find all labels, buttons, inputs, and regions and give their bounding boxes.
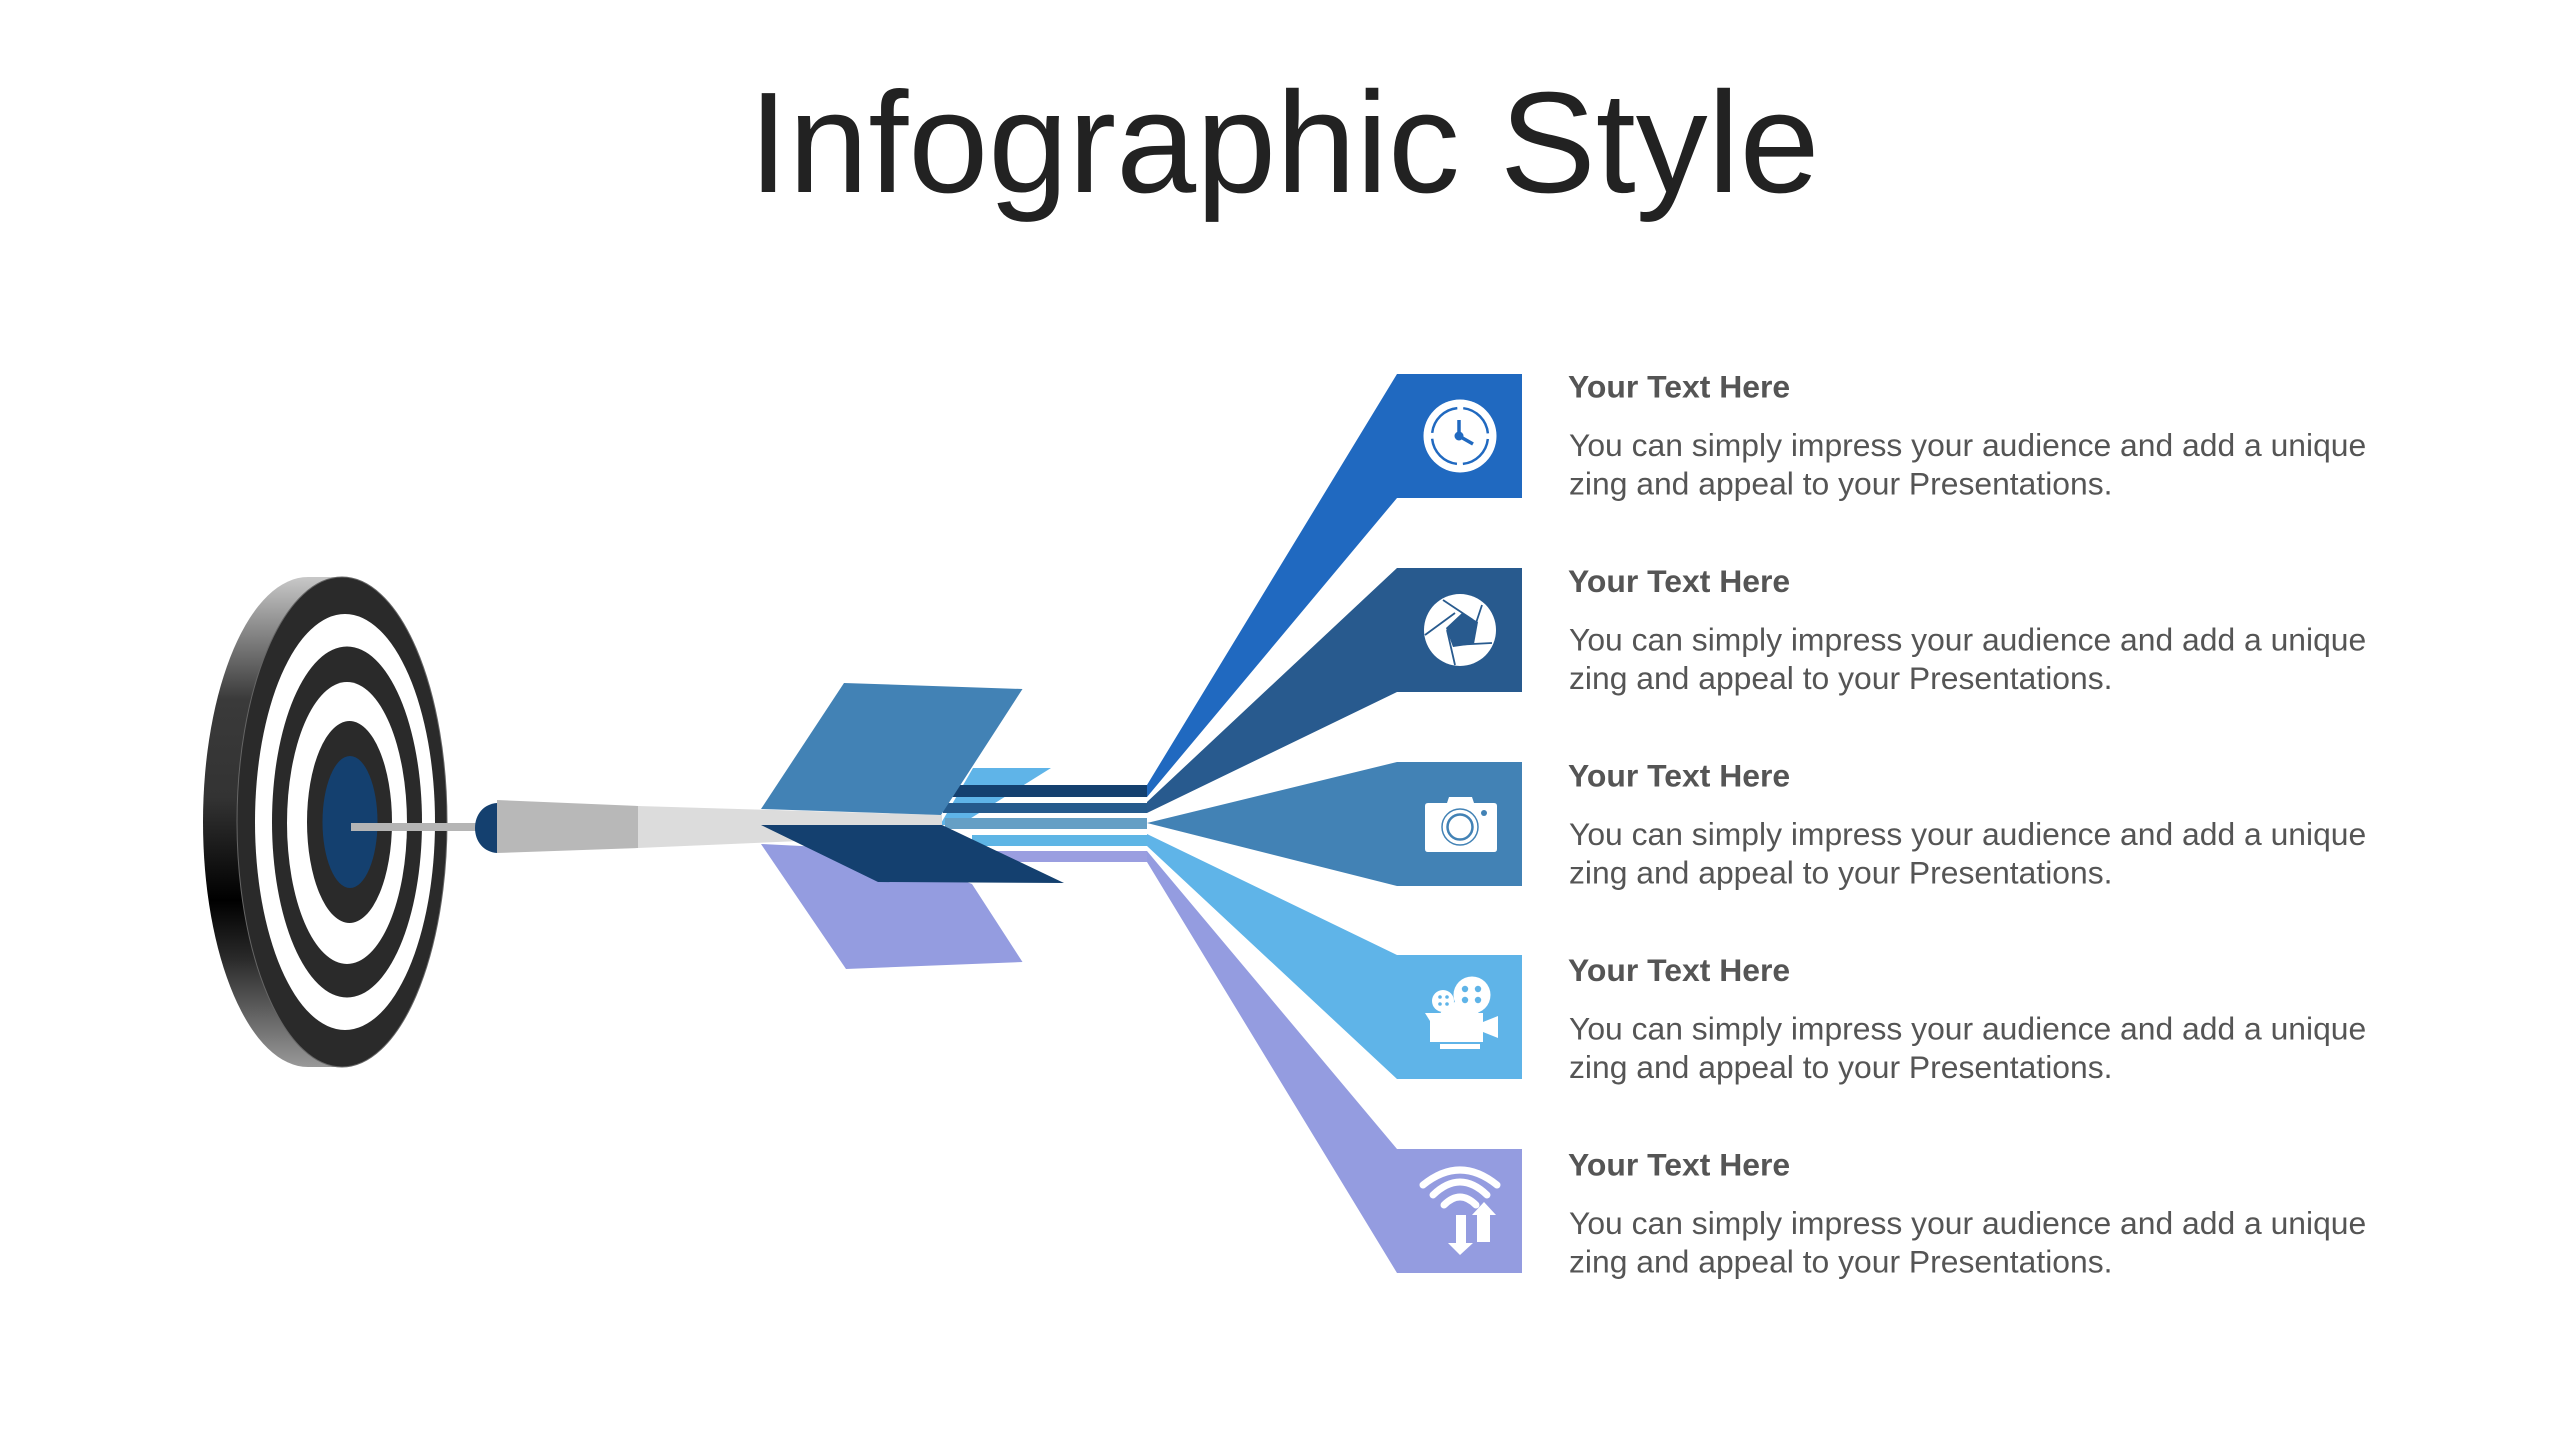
text block 2: Your Text Here xyxy=(1568,563,1790,599)
target rim xyxy=(203,577,342,1067)
text block 5: You can simply impress your audience and add a unique xyxy=(1569,1205,2366,1241)
icon: film camera xyxy=(1425,976,1498,1049)
dart barrel dark xyxy=(497,800,638,853)
text block 3: zing and appeal to your Presentations. xyxy=(1569,854,2112,890)
text block 4: You can simply impress your audience and add a unique xyxy=(1569,1010,2366,1046)
text block 3: Your Text Here xyxy=(1568,758,1790,794)
text block 1: Your Text Here xyxy=(1568,368,1790,404)
text block 5 xyxy=(1568,1146,2366,1280)
text block 2: You can simply impress your audience and add a unique xyxy=(1569,622,2366,658)
icon: shutter xyxy=(1424,594,1496,666)
text block 5: zing and appeal to your Presentations. xyxy=(1569,1244,2112,1280)
arm 2 xyxy=(1147,568,1522,813)
dart needle xyxy=(351,823,477,831)
dark lower fin xyxy=(761,825,1064,883)
icon: camera xyxy=(1425,797,1497,852)
bullseye xyxy=(322,756,378,888)
text block 4 xyxy=(1568,952,2366,1085)
lower periwinkle fin xyxy=(761,844,1022,969)
dart barrel light xyxy=(638,806,942,848)
upper fin xyxy=(761,683,1022,815)
dart stems xyxy=(943,785,1147,862)
icon: clock xyxy=(1424,400,1496,472)
text block 4: zing and appeal to your Presentations. xyxy=(1569,1049,2112,1085)
dart tip cap xyxy=(475,803,497,853)
text block 1 xyxy=(1568,368,2366,502)
icon: wifi transfer xyxy=(1423,1170,1497,1255)
text block 1: You can simply impress your audience and add a unique xyxy=(1569,427,2366,463)
text block 2 xyxy=(1568,563,2366,696)
title: Infographic Style xyxy=(748,63,1820,223)
arm 3 xyxy=(1147,762,1522,886)
text block 3 xyxy=(1568,758,2366,890)
text block 2: zing and appeal to your Presentations. xyxy=(1569,660,2112,696)
text block 5: Your Text Here xyxy=(1568,1146,1790,1182)
target board xyxy=(203,577,447,1067)
target rings xyxy=(237,577,447,1067)
light blue rear fin xyxy=(940,768,1051,825)
text block 3: You can simply impress your audience and add a unique xyxy=(1569,816,2366,852)
arm 1 xyxy=(1147,374,1522,797)
text block 1: zing and appeal to your Presentations. xyxy=(1569,466,2112,502)
arm 4 xyxy=(1147,834,1522,1079)
text block 4: Your Text Here xyxy=(1568,952,1790,988)
arm 5 xyxy=(1147,851,1522,1273)
